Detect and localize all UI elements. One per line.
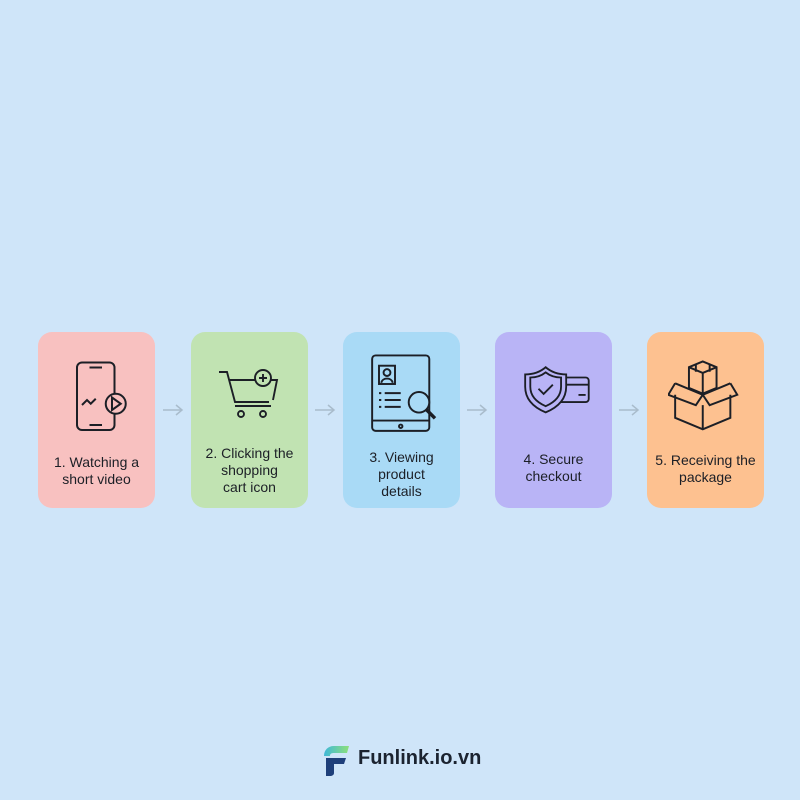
logo	[324, 746, 481, 776]
icon: funlink logo	[324, 746, 349, 776]
label 2	[206, 445, 293, 495]
label 3: details	[381, 483, 422, 499]
label 2: cart icon	[223, 479, 276, 495]
label 1: short video	[62, 471, 131, 487]
card 2: clicking cart	[191, 332, 308, 508]
label 5: 5. Receiving the	[655, 452, 756, 468]
icon: tablet with magnifier	[371, 354, 436, 432]
label 4: 4. Secure	[524, 451, 583, 467]
icon: cart with plus	[219, 369, 278, 418]
arrow 1	[163, 404, 183, 416]
label 3	[369, 449, 434, 499]
arrow 4	[619, 404, 639, 416]
card 1: watching a short video	[38, 332, 155, 508]
label 3: product	[378, 466, 425, 482]
label 4: checkout	[525, 468, 582, 484]
label 2: shopping	[221, 462, 278, 478]
label 5: package	[679, 469, 732, 485]
card 5: receiving package	[647, 332, 764, 508]
brand text: Funlink.io.vn	[358, 747, 481, 769]
arrow 3	[467, 404, 487, 416]
arrow 2	[315, 404, 335, 416]
label 5	[655, 452, 756, 485]
label 1	[54, 454, 140, 487]
label 2: 2. Clicking the	[206, 445, 293, 461]
icon: open box	[668, 360, 739, 430]
icon: shield with card	[524, 366, 590, 414]
card 4: secure checkout	[495, 332, 612, 508]
card 3: viewing product details	[343, 332, 460, 508]
label 4	[524, 451, 583, 484]
icon: phone with play	[76, 362, 127, 431]
label 1: 1. Watching a	[54, 454, 139, 470]
label 3: 3. Viewing	[369, 449, 434, 465]
